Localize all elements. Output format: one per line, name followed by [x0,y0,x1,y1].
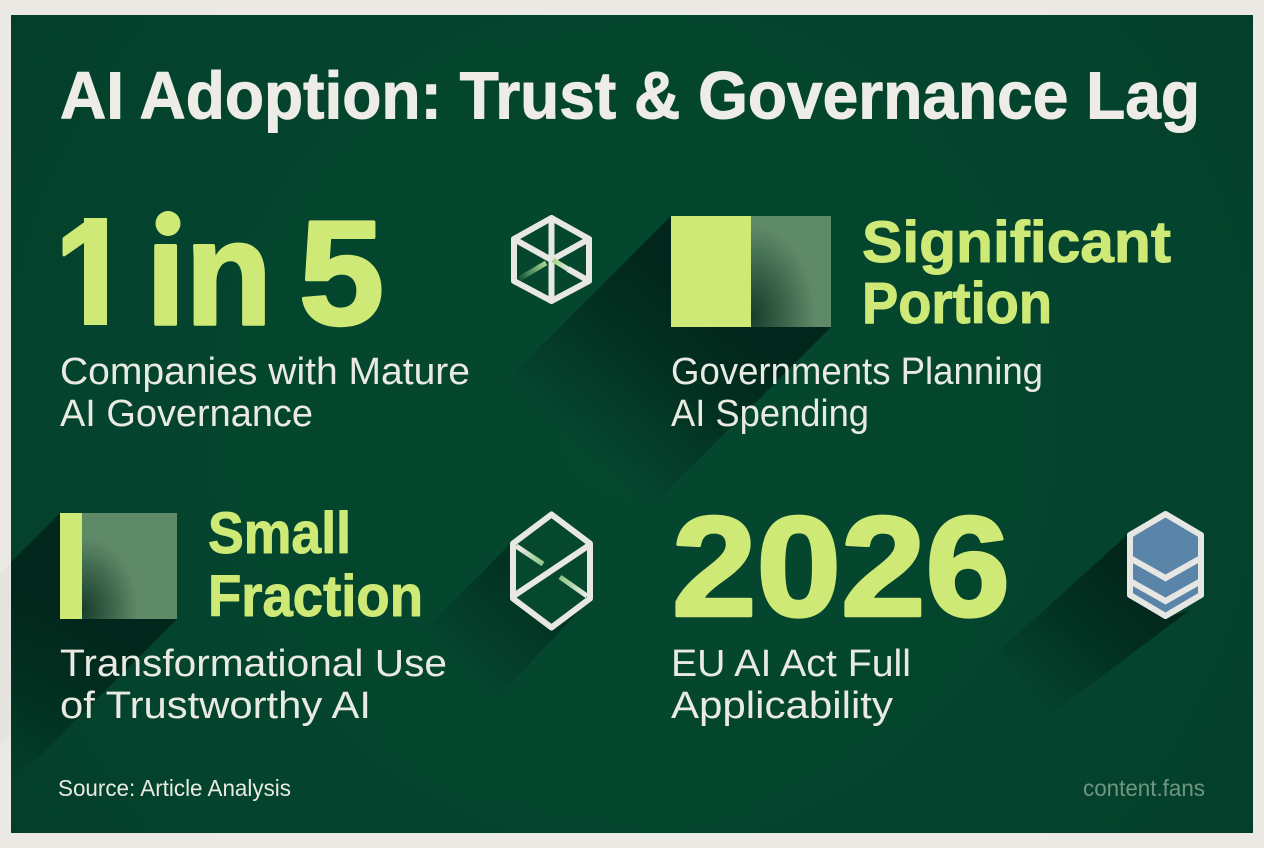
description: governments planning AI spending: AI Spending [671,393,869,435]
description: EU AI Act full applicability: EU AI Act Full [671,643,911,685]
icon: split hexagon [430,514,590,695]
description: EU AI Act full applicability [671,643,911,727]
proportion square: small slice filled [60,513,177,619]
description: governments planning AI spending: Governments Planning [671,351,1043,393]
heading: significant portion: Significant [862,210,1171,275]
panel: EU AI Act [671,488,1010,727]
stat: 1 in 5: in [146,191,272,356]
icon: layered blue hexagon [1000,514,1201,715]
icon: hexagon cube [514,218,589,301]
description: companies with mature AI governance: Companies with Mature [60,351,470,393]
title: AI Adoption: Trust & Governance Lag [60,58,1200,134]
long shadow behind proportion square [491,216,831,507]
proportion square: half filled [671,216,831,327]
description: transformational use of trustworthy AI: Transformational Use [60,643,447,685]
heading: significant portion: Portion [862,271,1052,336]
stat: 1 in 5: 1 [55,191,129,356]
panel: government AI spending [491,210,1171,507]
stat: 1 in 5: 5 [299,191,384,356]
heading: small fraction [208,501,423,629]
source note: Source: Article Analysis [58,775,291,801]
panel: mature AI governance [60,211,468,426]
long shadow on page margin [0,562,11,745]
brand mark: content.fans [1083,775,1205,801]
description: transformational use of trustworthy AI [60,643,447,727]
description: EU AI Act full applicability: Applicability [671,685,893,727]
long shadow behind fraction square [11,513,177,775]
description: governments planning AI spending [671,351,1043,435]
panel: transformational use [0,501,447,775]
heading: significant portion [862,210,1171,336]
description: companies with mature AI governance: AI Governance [60,393,313,435]
stat: 1 in 5 [62,211,382,328]
heading: small fraction: Fraction [208,564,423,629]
description: transformational use of trustworthy AI: of Trustworthy AI [60,685,371,727]
heading: small fraction: Small [208,501,351,566]
stat: 2026: 2026 [672,488,1010,646]
description: companies with mature AI governance [60,351,470,435]
